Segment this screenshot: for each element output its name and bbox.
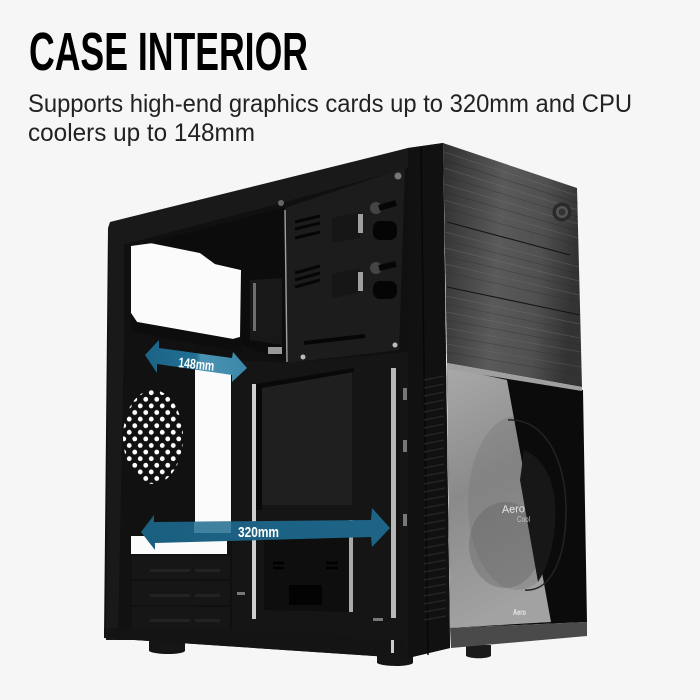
silver strip [447,363,582,391]
glass reflection [447,367,551,628]
PCI slot covers [132,556,230,630]
arrow: 320mm [141,508,390,550]
silver rail: right [391,368,396,618]
drive bay details [268,172,402,360]
motherboard tray [232,352,408,658]
foot: left [149,640,185,654]
label: 320mm: 320mm [238,524,279,541]
arrow: 148mm [145,340,247,382]
upper interior [150,207,285,360]
panel logo [502,503,530,617]
foot: front [466,645,491,658]
brushed texture [444,152,581,375]
drive cage edge highlight [285,210,287,362]
rear panel [118,320,195,640]
foot: middle [377,650,413,666]
secondary bay [250,278,282,345]
panel logo: Aero [502,503,525,516]
tray recess frame [256,368,354,510]
label: 148mm: 148mm [178,354,215,374]
tray clips [237,388,407,621]
bottom rail bright screw [391,640,394,653]
front panel brushed section [443,143,582,387]
top flange [108,148,408,246]
panel logo: Aero [513,608,526,617]
PSU opening [131,243,241,339]
subtitle: coolers up to 148mm [28,119,255,147]
panel logo: Cool [517,515,530,524]
computer case [104,143,587,666]
fan grille [123,390,183,484]
drive cage [285,168,405,363]
tray inner recess [258,372,352,505]
power button [552,202,572,222]
glass panel [447,367,587,628]
side strip [408,143,450,658]
panel grooves [447,222,580,315]
subtitle [28,90,632,147]
infographic canvas [29,32,630,666]
title: CASE INTERIOR [29,22,308,82]
vent slats [424,376,446,620]
fan blades [520,450,556,582]
arrow highlight over cutout [194,522,231,533]
silver rail: left [252,384,256,619]
cutout in tray [289,585,322,605]
motherboard cutout [131,360,231,554]
fan behind reflection [468,416,542,590]
left frame edge [106,244,124,640]
secondary bay highlight [253,283,256,331]
subtitle: Supports high-end graphics cards up to 320mm and CPU [28,90,632,118]
front bottom band [450,622,587,648]
PSU opening lower edge [131,313,242,352]
fan ring behind glass [508,420,566,590]
side strip seam [421,148,428,655]
case side frame [104,143,450,658]
tray slots [273,563,338,568]
silver rail: inner [349,520,353,612]
bottom rail [104,628,408,658]
tray lower section [264,535,352,612]
